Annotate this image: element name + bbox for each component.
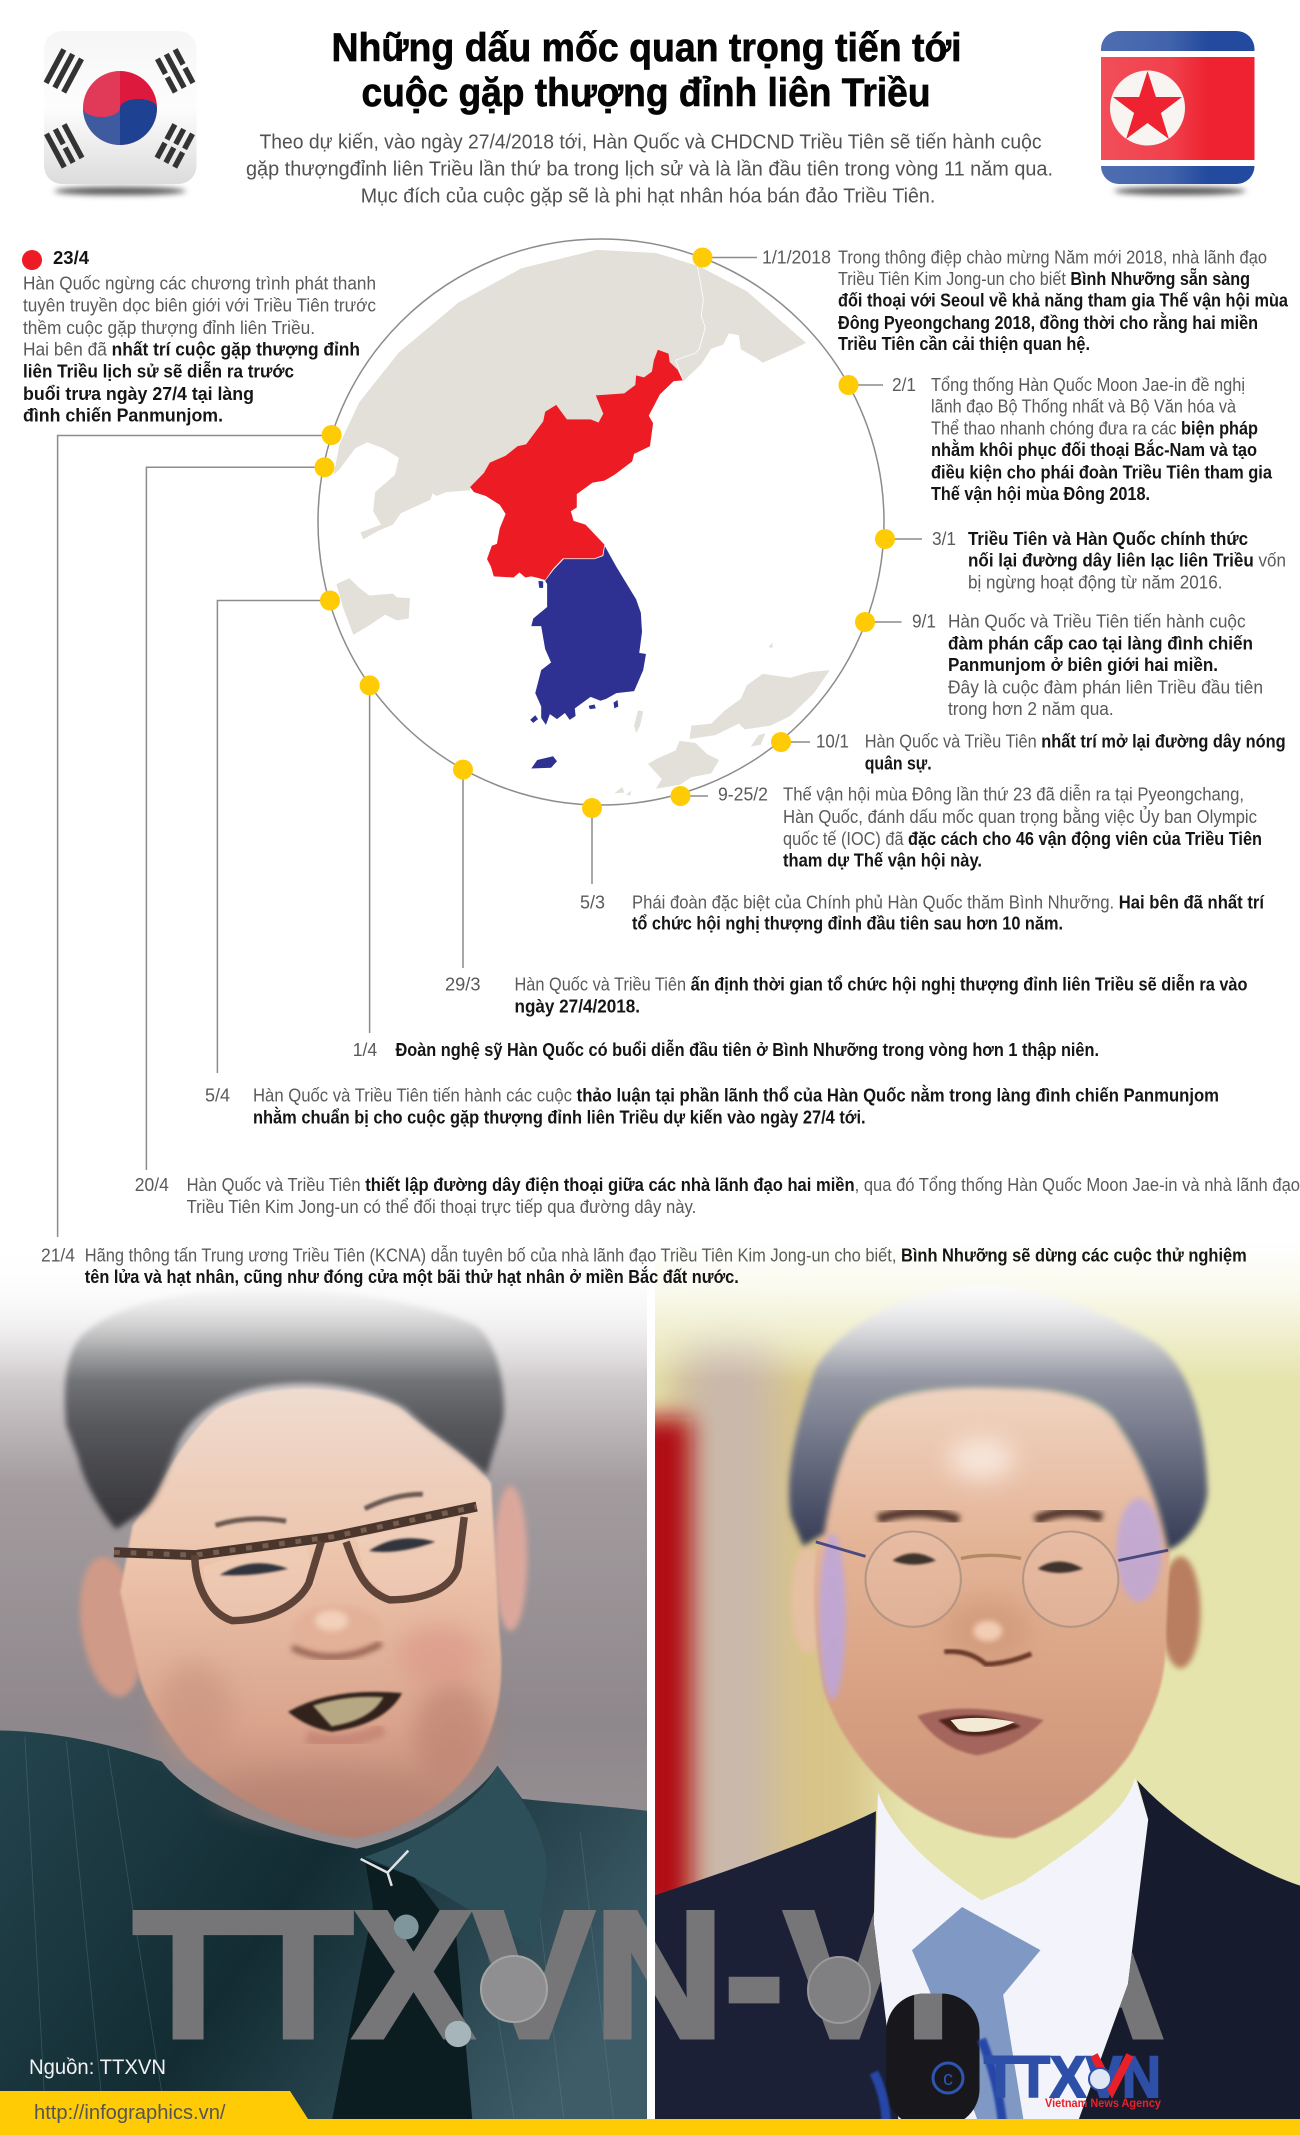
divider between portraits	[647, 1240, 655, 2119]
land: Japan	[614, 643, 830, 796]
event: 3/1	[932, 529, 1286, 592]
event: 1/1/2018: 1/1/2018	[762, 247, 831, 267]
footer bar	[0, 2091, 1300, 2135]
source: Nguồn: TTXVN	[29, 2056, 166, 2079]
event: 1/4: Đoàn nghệ sỹ Hàn Quốc có buổi diễn đầu tiên ở Bình Nhưỡng trong vòng hơn 1 thập niên.	[396, 1039, 1099, 1060]
event: 23/4: Hàn Quốc ngừng các chương trình phát thanh	[23, 273, 376, 293]
event: 9/1: trong hơn 2 năm qua.	[948, 699, 1114, 719]
land: Shandong	[336, 578, 410, 635]
event: 1/1/2018	[762, 247, 1289, 354]
icon: North Korea flag	[1101, 31, 1254, 195]
logo: TTXVN Vietnam News Agency: c	[943, 2068, 953, 2090]
event: 29/3: ngày 27/4/2018.	[514, 996, 640, 1016]
event: 2/1: điều kiện cho phái đoàn Triều Tiên tham gia	[931, 462, 1273, 482]
event: 23/4: liên Triều lịch sử sẽ diễn ra trước	[23, 361, 294, 382]
event: 20/4: Triều Tiên Kim Jong-un có thể đối thoại trực tiếp qua đường dây này.	[187, 1197, 696, 1217]
event: 5/4: Hàn Quốc và Triều Tiên tiến hành các cuộc thảo luận tại phần lãnh thổ của Hàn Quốc nằm trong làng đình chiến Panmunjom	[253, 1085, 1219, 1106]
North Korea	[470, 350, 683, 580]
event: 9-25/2	[718, 784, 1262, 871]
event: 20/4	[135, 1175, 1300, 1217]
logo: TTXVN Vietnam News Agency: TTXVN	[984, 2045, 1161, 2110]
event: 21/4: 21/4	[41, 1246, 75, 1266]
timeline markers	[314, 248, 895, 818]
event: 5/3: tổ chức hội nghị thượng đỉnh đầu tiên sau hơn 10 năm.	[632, 913, 1063, 933]
event: 5/3	[580, 892, 1265, 933]
event: 10/1: quân sự.	[865, 753, 932, 773]
event: 9-25/2: tham dự Thế vận hội này.	[783, 851, 982, 871]
event: 9-25/2: Hàn Quốc, đánh dấu mốc quan trọng bằng việc Ủy ban Olympic	[783, 806, 1257, 827]
South Korea	[530, 546, 646, 768]
event: 23/4: tuyên truyền dọc biên giới với Triều Tiên trước	[23, 296, 376, 316]
event: 9/1: 9/1	[912, 612, 936, 632]
event: 2/1: Thế vận hội mùa Đông 2018.	[931, 484, 1150, 504]
event: 29/3: Hàn Quốc và Triều Tiên ấn định thời gian tổ chức hội nghị thượng đỉnh liên Triều sẽ diễn ra vào	[514, 974, 1248, 995]
event: 9/1: Hàn Quốc và Triều Tiên tiến hành cuộc	[948, 612, 1246, 632]
event: 9/1: đàm phán cấp cao tại làng đình chiến	[948, 633, 1253, 653]
event: 29/3	[445, 974, 1248, 1016]
event: 2/1: 2/1	[892, 375, 916, 395]
event: 1/1/2018: Triều Tiên Kim Jong-un cho biết Bình Nhưỡng sẵn sàng	[838, 267, 1250, 289]
intro text	[246, 131, 1053, 208]
event: 9-25/2: quốc tế (IOC) đã đặc cách cho 46 vận động viên của Triều Tiên	[783, 829, 1262, 849]
event: 9/1	[912, 612, 1263, 719]
event: 23/4: 23/4	[53, 248, 89, 268]
event: 9/1: Đây là cuộc đàm phán liên Triều đầu tiên	[948, 677, 1263, 697]
photo: Moon Jae-in portrait	[633, 1240, 1300, 2126]
event: 23/4	[22, 248, 376, 426]
intro text: gặp thượngđỉnh liên Triều lần thứ ba trong lịch sử và là lần đầu tiên trong vòng 11 năm qua.	[246, 159, 1053, 181]
event: 23/4: đình chiến Panmunjom.	[23, 406, 223, 426]
event: 10/1	[816, 732, 1286, 773]
land: China and Russia	[334, 250, 806, 539]
intro text: Theo dự kiến, vào ngày 27/4/2018 tới, Hàn Quốc và CHDCND Triều Tiên sẽ tiến hành cuộc	[260, 131, 1042, 153]
event: 5/4: nhằm chuẩn bị cho cuộc gặp thượng đỉnh liên Triều dự kiến vào ngày 27/4 tới.	[253, 1106, 866, 1127]
header	[44, 26, 1255, 208]
event: 29/3: 29/3	[445, 975, 480, 995]
event: 3/1: nối lại đường dây liên lạc liên Triều vốn	[968, 551, 1286, 571]
event: 9-25/2: Thế vận hội mùa Đông lần thứ 23 đã diễn ra tại Pyeongchang,	[783, 784, 1244, 805]
event: 5/3: 5/3	[580, 892, 605, 912]
event: 1/1/2018: Trong thông điệp chào mừng Năm mới 2018, nhà lãnh đạo	[838, 247, 1267, 267]
event: 3/1: Triều Tiên và Hàn Quốc chính thức	[968, 529, 1248, 549]
event: 10/1: Hàn Quốc và Triều Tiên nhất trí mở lại đường dây nóng	[865, 732, 1286, 752]
event: 23/4: thềm cuộc gặp thượng đỉnh liên Triều.	[23, 318, 315, 338]
watermark: TTXVN-VNA: TTXVN-VNA	[133, 1874, 1165, 2076]
logo: TTXVN Vietnam News Agency: Vietnam News Agency	[1045, 2096, 1161, 2110]
website url: http://infographics.vn/	[34, 2102, 226, 2124]
event: 21/4	[41, 1245, 1247, 1287]
timeline circle	[318, 239, 884, 805]
event: 5/4: 5/4	[205, 1086, 230, 1106]
border: Russia China	[676, 266, 705, 380]
event: 23/4: Hai bên đã nhất trí cuộc gặp thượng đỉnh	[23, 340, 360, 360]
event: 3/1: bị ngừng hoạt động từ năm 2016.	[968, 572, 1222, 592]
event: 2/1: nhằm khôi phục đối thoại Bắc-Nam và tạo	[931, 439, 1257, 460]
event: 9-25/2: 9-25/2	[718, 785, 768, 805]
event: 5/4	[205, 1085, 1219, 1127]
event: 2/1: Tổng thống Hàn Quốc Moon Jae-in đề nghị	[931, 375, 1245, 395]
event: 1/1/2018: Triều Tiên cần cải thiện quan hệ.	[838, 334, 1090, 354]
event: 21/4: Hãng thông tấn Trung ương Triều Tiên (KCNA) dẫn tuyên bố của nhà lãnh đạo Triều Tiên Kim Jong-un cho biết, Bình Nhưỡng sẽ dừng các cuộc thử nghiệm	[85, 1245, 1247, 1266]
event: 23/4: buổi trưa ngày 27/4 tại làng	[23, 384, 254, 404]
title	[332, 26, 962, 115]
map of Korean peninsula	[318, 239, 884, 805]
event: 3/1: 3/1	[932, 529, 956, 549]
title: cuộc gặp thượng đỉnh liên Triều	[362, 71, 930, 115]
event: 1/1/2018: Đông Pyeongchang 2018, đồng thời cho rằng hai miền	[838, 312, 1258, 333]
event: 9/1: Panmunjom ở biên giới hai miền.	[948, 655, 1218, 675]
event: 21/4: tên lửa và hạt nhân, cũng như đóng cửa một bãi thử hạt nhân ở miền Bắc đất nước.	[85, 1266, 739, 1287]
title: Những dấu mốc quan trọng tiến tới	[332, 26, 962, 70]
event: 5/3: Phái đoàn đặc biệt của Chính phủ Hàn Quốc thăm Bình Nhưỡng. Hai bên đã nhất trí	[632, 892, 1265, 912]
event: 2/1: Thể thao nhanh chóng đưa ra các biện pháp	[931, 418, 1258, 438]
event: 1/4: 1/4	[353, 1040, 377, 1060]
connector lines	[58, 258, 922, 1237]
photo top fade	[0, 1240, 1300, 1380]
event: 20/4: 20/4	[135, 1175, 169, 1195]
photo: Kim Jong-un portrait	[0, 1240, 651, 2122]
event: 10/1: 10/1	[816, 732, 849, 752]
event: 2/1: lãnh đạo Bộ Thống nhất và Bộ Văn hóa và	[931, 396, 1237, 416]
icon: South Korea flag	[44, 31, 197, 195]
intro text: Mục đích của cuộc gặp sẽ là phi hạt nhân hóa bán đảo Triều Tiên.	[361, 186, 935, 208]
event: 2/1	[892, 375, 1273, 504]
